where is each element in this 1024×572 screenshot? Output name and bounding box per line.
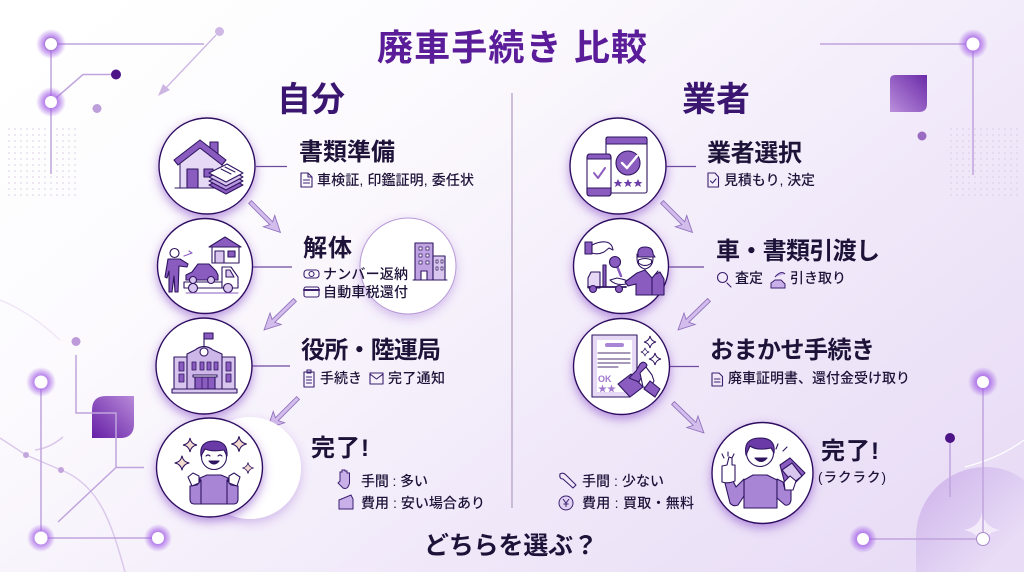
arrow: step 1 to 2: [656, 196, 698, 238]
icon: house and papers: [159, 118, 255, 214]
icon: card: [304, 287, 319, 297]
icon: key handover: [574, 218, 668, 314]
text: 書類準備: [299, 139, 474, 188]
text: 役所・陸運局: 役所・陸運局: [301, 337, 441, 364]
icon: yen coin: [559, 496, 573, 510]
decoration: top-left circuit: [4, 27, 224, 200]
sub text: 査定: 査定: [735, 270, 763, 286]
icon: white halo behind finished person: [199, 417, 301, 519]
text: 業者選択: 業者選択: [707, 140, 802, 167]
summary: 手間 少ない: 手間 : 少ない: [582, 473, 664, 489]
heading: 業者: 業者: [682, 81, 750, 119]
icon: OK document and stamp: OK: [598, 374, 612, 384]
icon: white office circle: [360, 218, 456, 314]
text: ラクラク: (ラクラク): [818, 470, 886, 485]
sub text: 完了通知: 完了通知: [388, 370, 445, 386]
text: おまかせ手続き: おまかせ手続き: [710, 337, 875, 364]
icon: magnifier: [718, 272, 731, 287]
sub text: 車検証, 印鑑証明, 委任状: [317, 172, 474, 188]
connectors: [252, 166, 292, 366]
heading: 自分: 自分: [277, 81, 345, 119]
icon: hand: [338, 470, 350, 488]
text: 業者選択: [707, 140, 815, 188]
decoration: top-right circuit: [820, 29, 1020, 200]
icon: happy person with money: [712, 422, 813, 524]
sub text: 手続き: 手続き: [320, 370, 362, 386]
arrow: step 2 to 3: [673, 294, 715, 336]
text: 解体: 解体: [303, 235, 352, 262]
icon: envelope: [370, 373, 383, 384]
arrow: step 2 to 3: [259, 294, 301, 336]
icon: tow truck scene: [158, 218, 252, 314]
sub text: 廃車証明書、還付金受け取り: [728, 370, 910, 386]
footer question: どちらを選ぶ？: [424, 532, 598, 560]
text: 書類準備: 書類準備: [299, 139, 395, 166]
text: 完了 right: 完了!: [821, 438, 879, 465]
icon: number plate: [304, 270, 319, 278]
summary: 手間 多い: 手間 : 多い: [361, 473, 428, 489]
title: 廃車手続き 比較: [377, 27, 647, 68]
sub text: 引き取り: 引き取り: [790, 270, 846, 286]
icon: wrench: [560, 473, 576, 488]
icon: government building: [156, 318, 252, 414]
icon: wallet: [339, 495, 353, 509]
decoration: bottom-left circuit: [0, 300, 172, 572]
text: 役所・陸運局: [301, 337, 445, 387]
arrow: step 3 to 4: [667, 397, 709, 439]
text: 車・書類引渡し: [716, 238, 880, 288]
sub text: 自動車税還付: 自動車税還付: [323, 284, 408, 300]
text: 車・書類引渡し: 車・書類引渡し: [716, 238, 880, 265]
summary: 手間 多い: [338, 470, 428, 489]
panel: 業者: [559, 81, 910, 524]
icon: tow car: [771, 273, 785, 288]
arrow: step 3 to 4: [262, 392, 304, 434]
arrow: step 1 to 2: [244, 196, 286, 238]
summary: 費用 買取・無料: 費用 : 買取・無料: [582, 495, 694, 511]
icon: phone and review window: [570, 118, 666, 214]
icon: document: [301, 173, 312, 187]
text: おまかせ手続き: [710, 337, 910, 386]
text: 完了 left: 完了!: [311, 435, 369, 462]
icon: checked document: [708, 173, 718, 187]
text: 解体: [303, 235, 408, 300]
summary: 費用 安い場合あり: 費用 : 安い場合あり: [361, 495, 485, 511]
icon: OK document and stamp: [574, 318, 670, 414]
panel: 自分: [156, 81, 485, 519]
connectors: [666, 166, 704, 366]
center divider: [511, 93, 513, 508]
icon: happy person: [156, 418, 262, 517]
sub text: ナンバー返納: ナンバー返納: [323, 266, 408, 282]
sub text: 見積もり, 決定: [724, 172, 815, 188]
icon: OK document and stamp: ★★: [598, 384, 616, 394]
decoration: bottom-right circuit: [849, 367, 1024, 572]
icon: clipboard: [304, 370, 314, 387]
icon: document: [712, 373, 722, 386]
